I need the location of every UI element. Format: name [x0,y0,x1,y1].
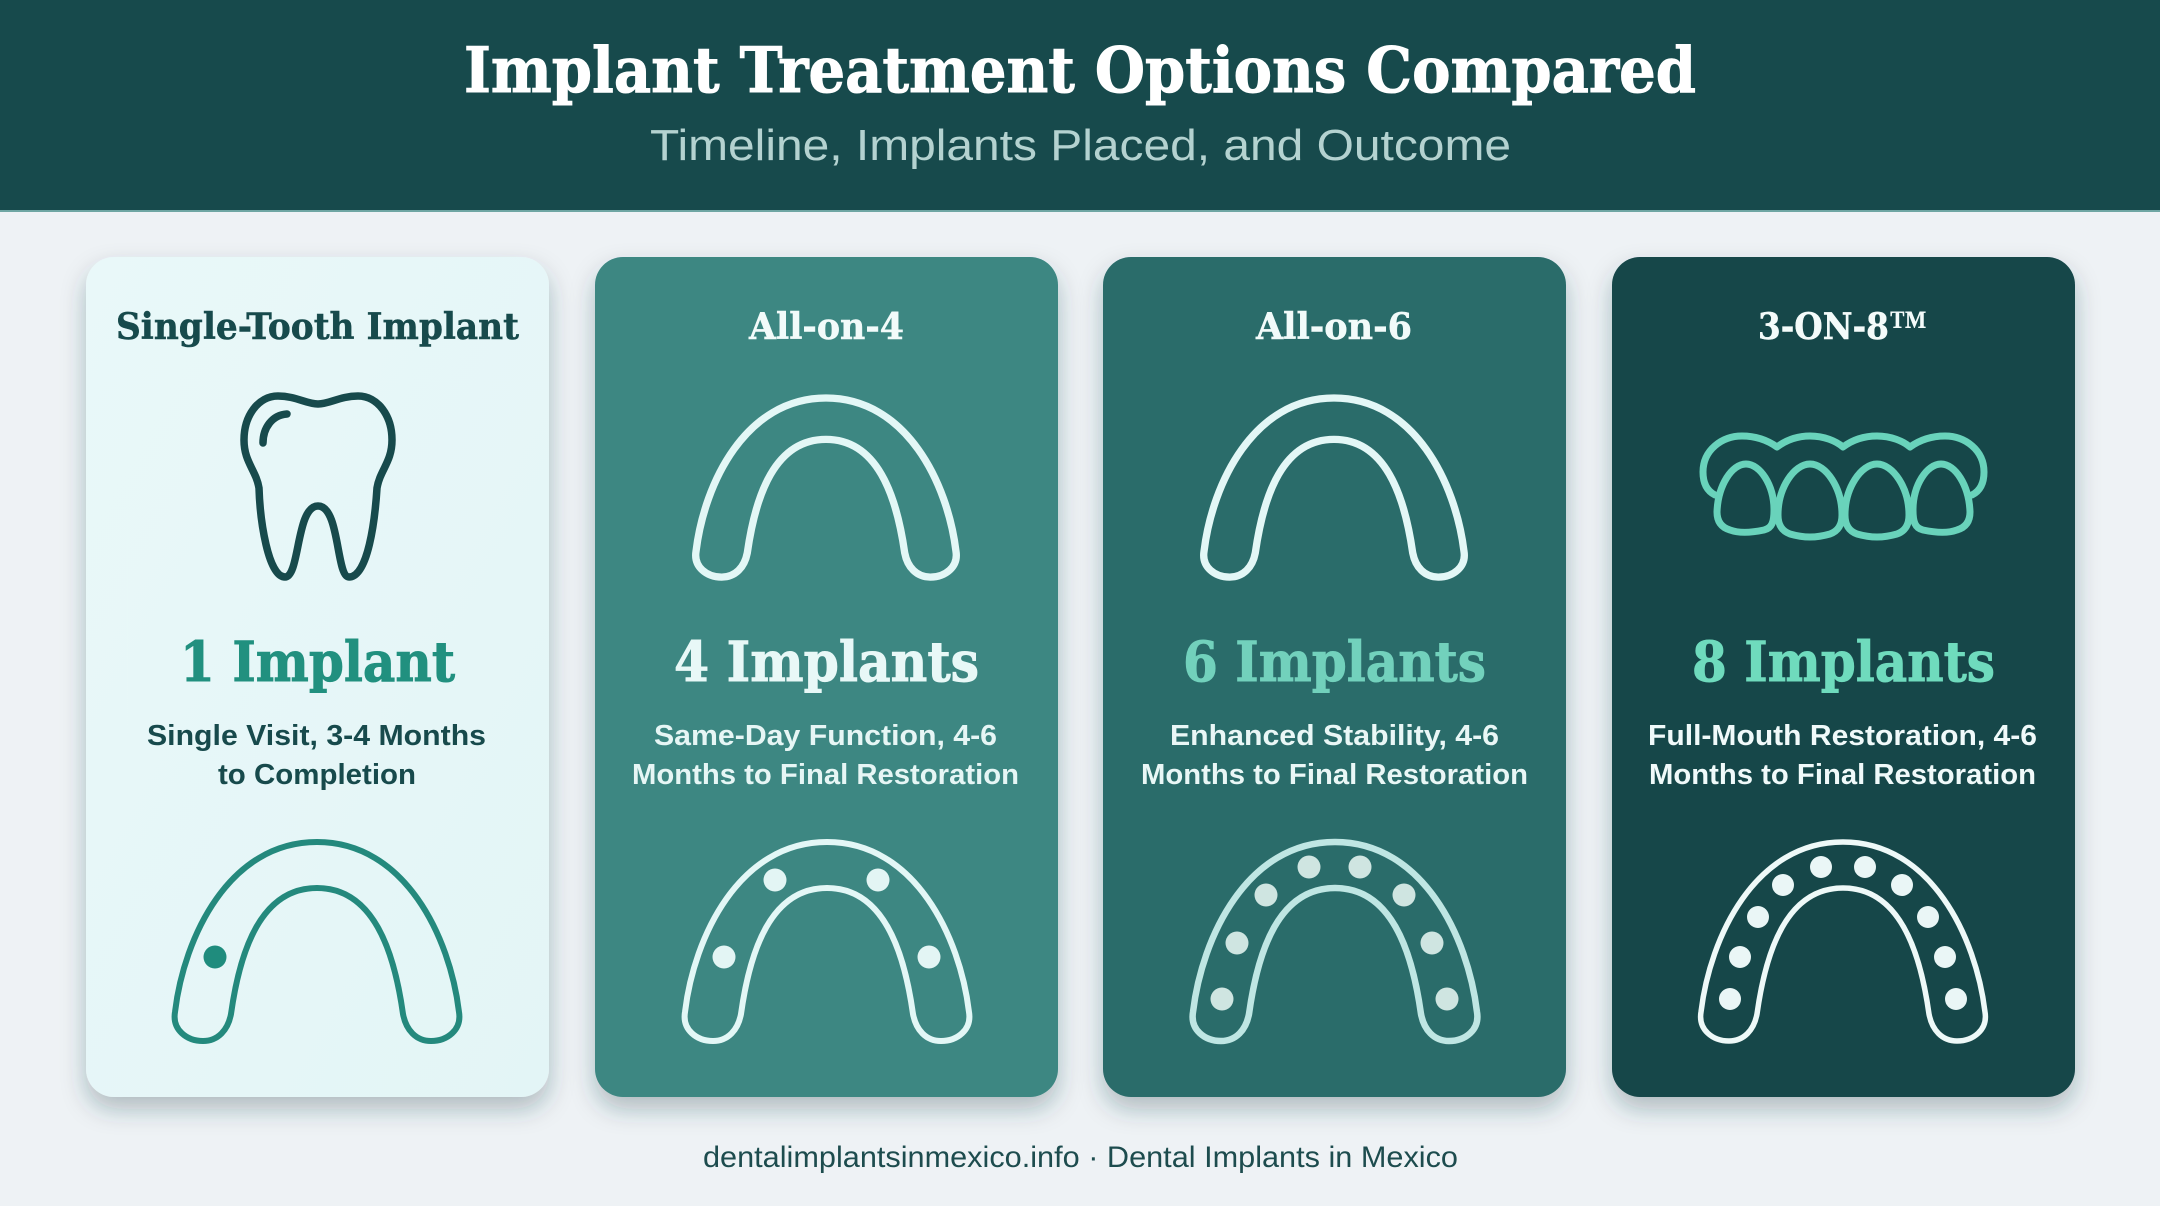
diagram: arch with one implant [175,842,459,1041]
panel: 3-on-8 [1612,257,2075,1097]
heading: all-on-4: All-on-4 [748,306,904,348]
footer: dentalimplantsinmexico.info · Dental Implants in Mexico [703,1141,1458,1174]
header banner [0,0,2160,212]
heading: 3-on-8: 3-ON-8™ [1758,303,1927,349]
description: Single Visit, 3-4 Months [147,720,486,752]
implant count: 8 Implants [1692,629,1995,694]
description [1141,720,1528,791]
description: Months to Final Restoration [1649,759,2036,791]
description [147,720,486,791]
heading: single-tooth implant: Single-Tooth Implant [116,306,519,348]
icon: upper teeth bridge [1703,436,1984,537]
panel: all-on-6 [1103,257,1566,1097]
description: Full-Mouth Restoration, 4-6 [1648,720,2037,752]
description: to Completion [218,759,416,791]
description: Months to Final Restoration [1141,759,1528,791]
description: Enhanced Stability, 4-6 [1170,720,1499,752]
title: Implant Treatment Options Compared [464,33,1696,107]
implant count: 1 Implant [180,629,456,694]
icon: arch outline [1204,398,1464,577]
description: Months to Final Restoration [632,759,1019,791]
heading: all-on-6: All-on-6 [1255,306,1412,348]
diagram: arch with ten implant dots [1701,842,1985,1041]
description [1648,720,2037,791]
diagram: arch with four implants [685,842,969,1041]
description: Same-Day Function, 4-6 [654,720,997,752]
icon: arch outline [696,398,956,577]
description [632,720,1019,791]
implant count: 6 Implants [1183,629,1486,694]
diagram: arch with eight implants [1193,842,1477,1041]
subtitle: Timeline, Implants Placed, and Outcome [650,121,1511,170]
implant count: 4 Implants [674,629,979,694]
panel: all-on-4 [595,257,1058,1097]
panel: single-tooth implant [86,257,549,1097]
icon: single tooth [244,396,392,577]
